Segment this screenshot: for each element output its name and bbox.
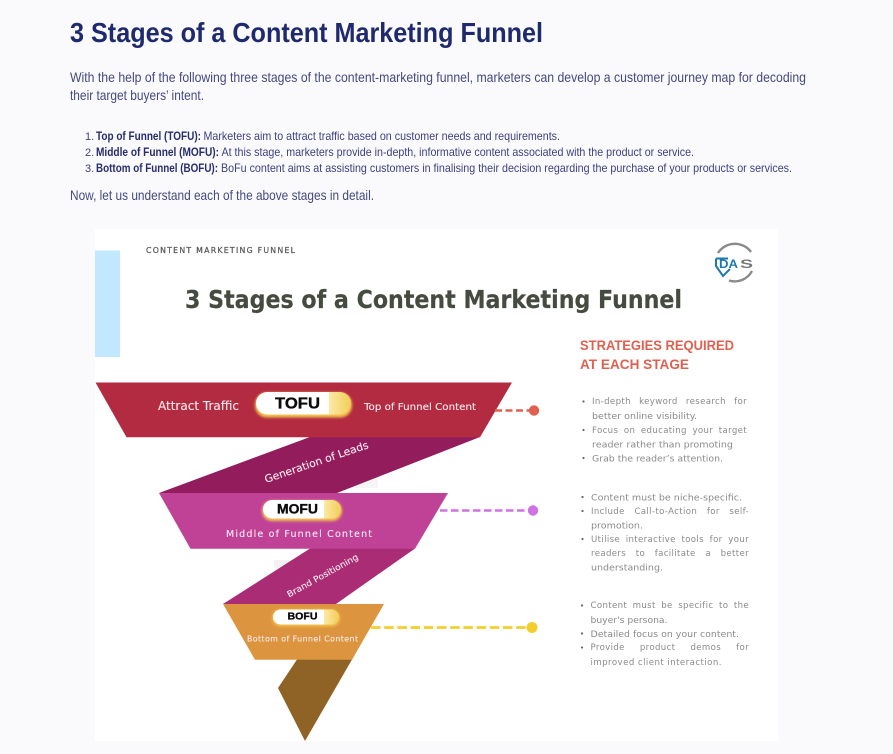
BOFU stage (223, 604, 384, 660)
strategies: BOFU: improved client interaction. (590, 658, 722, 668)
strategies: BOFU: Provide product demos for (590, 643, 749, 653)
intro paragraph (70, 69, 806, 103)
numbered list of stages (85, 129, 792, 175)
full page drawing (70, 22, 806, 741)
strategies: MOFU: Utilise interactive tools for your (591, 534, 749, 544)
strategies heading: STRATEGIES REQUIRED (580, 338, 734, 353)
band: brand positioning: Brand Positioning (286, 553, 360, 600)
icon: DAS logo: DA (719, 259, 738, 271)
light blue accent block (95, 250, 120, 357)
strategies: MOFU: understanding. (591, 564, 663, 574)
connector: MOFU (440, 505, 538, 516)
connector: BOFU (371, 622, 538, 633)
list item 1 (85, 129, 560, 143)
TOFU stage: Top of Funnel Content (363, 402, 476, 413)
band: generation of leads (159, 437, 480, 493)
page title: 3 Stages of a Content Marketing Funnel (70, 17, 543, 48)
strategies: BOFU: Detailed focus on your content. (590, 630, 739, 640)
strategies: BOFU: buyer's persona. (590, 616, 668, 626)
list item 3: 3. (85, 163, 94, 175)
list item 1: 1. (85, 131, 94, 143)
strategies: TOFU: Grab the reader’s attention. (592, 454, 723, 464)
intro paragraph: their target buyers’ intent. (70, 87, 204, 103)
infographic title: 3 Stages of a Content Marketing Funnel (185, 285, 682, 314)
MOFU stage: MOFU (277, 502, 318, 516)
strategies: TOFU: reader rather than promoting (592, 440, 733, 450)
list item 2: At this stage, marketers provide in-depth, informative content associated with the product or service. (222, 145, 694, 159)
strategies: TOFU: Focus on educating your target (592, 426, 747, 436)
BOFU stage: Bottom of Funnel Content (247, 634, 358, 644)
funnel (96, 382, 512, 741)
MOFU stage (159, 493, 448, 549)
band: generation of leads: Generation of Leads (263, 439, 370, 486)
strategies: BOFU (581, 599, 749, 668)
strategies: MOFU: promotion. (591, 522, 643, 532)
MOFU stage: Middle of Funnel Content (226, 529, 372, 540)
icon: DAS logo (716, 244, 754, 281)
strategies: TOFU (582, 395, 747, 464)
strategies: MOFU: Content must be niche-specific. (591, 494, 742, 504)
icon: DAS logo: S (740, 259, 754, 271)
strategies: TOFU: In-depth keyword research for (592, 397, 747, 407)
list item 2: 2. (85, 147, 94, 159)
BOFU stage: BOFU (288, 611, 318, 623)
strategies: MOFU: readers to facilitate a better (591, 548, 749, 558)
list item 1: Top of Funnel (TOFU): (96, 129, 201, 143)
infographic kicker: CONTENT MARKETING FUNNEL (146, 246, 296, 255)
strategies heading (580, 338, 734, 372)
list item 1: Marketers aim to attract traffic based on customer needs and requirements. (204, 129, 560, 143)
strategies: TOFU: better online visibility. (592, 412, 697, 422)
list item 3: BoFu content aims at assisting customers in finalising their decision regarding the purchase of your products or services. (221, 161, 792, 175)
TOFU stage: TOFU (275, 396, 320, 412)
strategies: MOFU (581, 494, 749, 574)
connector: TOFU (495, 405, 539, 416)
band: brand positioning (223, 548, 415, 604)
list item 3: Bottom of Funnel (BOFU): (96, 161, 218, 175)
infographic panel (95, 229, 778, 741)
strategies: MOFU: Include Call-to-Action for self- (591, 506, 749, 516)
list item 2: Middle of Funnel (MOFU): (96, 145, 219, 159)
TOFU stage: Attract Traffic (158, 399, 239, 413)
funnel tip (278, 660, 352, 741)
TOFU stage (96, 382, 512, 437)
transition sentence: Now, let us understand each of the above stages in detail. (70, 187, 374, 203)
strategies: BOFU: Content must be specific to the (590, 601, 749, 611)
strategies heading: AT EACH STAGE (580, 357, 689, 372)
intro paragraph: With the help of the following three stages of the content-marketing funnel, marketers can develop a customer journey map for decoding (70, 69, 806, 85)
